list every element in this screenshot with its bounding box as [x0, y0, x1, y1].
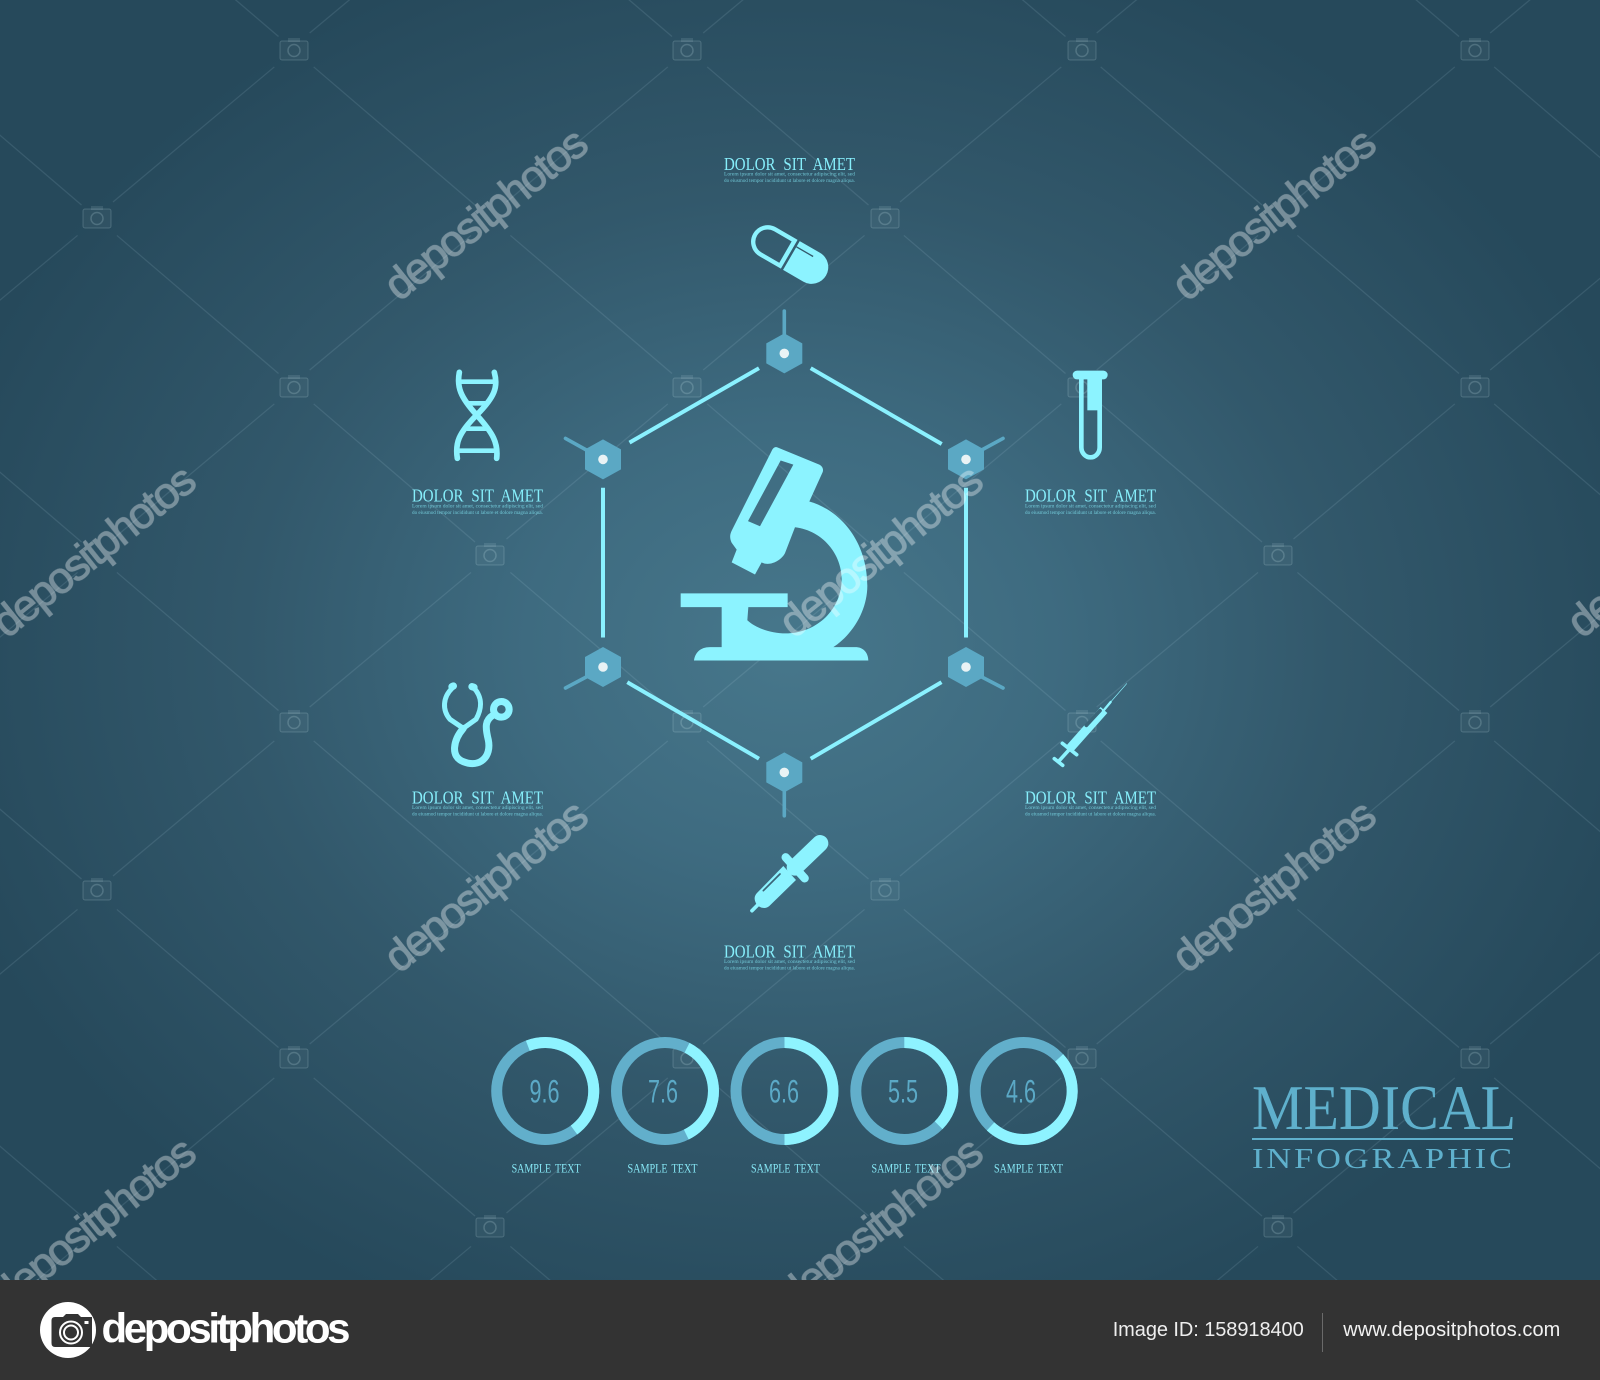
icon: microscope [681, 447, 868, 661]
image id: Image ID: 158918400 [1113, 1319, 1304, 1341]
logo wordmark: depositphotos [102, 1305, 350, 1352]
label: top: DOLOR SIT AMET [724, 154, 855, 174]
icon: depositphotos logo [40, 1302, 96, 1358]
label: upper right [1025, 486, 1156, 516]
icon: DNA helix [457, 372, 497, 458]
donut: 6.6: SAMPLE TEXT [751, 1162, 820, 1176]
donut: 4.6 [955, 1022, 1092, 1176]
icon: capsule [747, 220, 834, 290]
donut: 4.6: 4.6 [1006, 1074, 1036, 1110]
watermark camera icons [83, 38, 1489, 1237]
label: upper left: do eiusmod tempor incididunt ut labore et dolore magna aliqua. [412, 510, 543, 516]
depositphotos watermarks: depositphotos [375, 118, 597, 310]
donut: 5.5 [856, 1042, 953, 1176]
label: lower left: do eiusmod tempor incididunt ut labore et dolore magna aliqua. [412, 812, 543, 818]
donut: 9.6: SAMPLE TEXT [512, 1162, 581, 1176]
depositphotos watermarks: depositphotos [770, 455, 992, 647]
footer bar [0, 1280, 1600, 1380]
label: top: Lorem ipsum dolor sit amet, consectetur adipiscing elit, sed [724, 172, 855, 178]
label: upper left: Lorem ipsum dolor sit amet, consectetur adipiscing elit, sed [412, 504, 543, 510]
depositphotos watermarks: depositphotos [375, 790, 597, 982]
donut: 9.6: 9.6 [530, 1074, 560, 1110]
donut: 9.6 [483, 1028, 608, 1176]
hexagon nodes [585, 333, 984, 792]
label: top [724, 154, 855, 184]
donut: 5.5: 5.5 [888, 1074, 918, 1110]
depositphotos watermarks: depositphotos [1163, 118, 1385, 310]
donut: 6.6 [736, 1042, 833, 1176]
donut: 7.6: 7.6 [648, 1074, 678, 1110]
label: top: do eiusmod tempor incididunt ut labore et dolore magna aliqua. [724, 178, 855, 184]
label: lower right: DOLOR SIT AMET [1025, 787, 1156, 807]
label: bottom: Lorem ipsum dolor sit amet, consectetur adipiscing elit, sed [724, 959, 855, 965]
hexagon frame [566, 311, 1003, 816]
hexagon edges [603, 368, 966, 759]
label: upper left [412, 486, 543, 516]
donut: 7.6 [600, 1026, 730, 1176]
donut: 6.6: 6.6 [769, 1074, 799, 1110]
icon: dropper [752, 843, 820, 911]
node centres [598, 349, 971, 777]
label: lower left [412, 787, 543, 818]
website: www.depositphotos.com [1342, 1319, 1560, 1341]
label: upper right: do eiusmod tempor incididunt ut labore et dolore magna aliqua. [1025, 510, 1156, 516]
donut: 7.6: SAMPLE TEXT [628, 1162, 698, 1176]
label: bottom [724, 941, 855, 972]
hexagon spokes [566, 311, 1003, 816]
label: upper left: DOLOR SIT AMET [412, 486, 543, 506]
label: bottom: DOLOR SIT AMET [724, 941, 855, 961]
label: lower right [1025, 787, 1156, 818]
title block: MEDICAL [1252, 1072, 1516, 1143]
label: lower left: DOLOR SIT AMET [412, 787, 543, 807]
depositphotos watermarks: depositphotos [770, 1127, 992, 1319]
label: lower right: do eiusmod tempor incididunt ut labore et dolore magna aliqua. [1025, 812, 1156, 818]
label: lower left: Lorem ipsum dolor sit amet, consectetur adipiscing elit, sed [412, 805, 543, 811]
label: bottom: do eiusmod tempor incididunt ut labore et dolore magna aliqua. [724, 966, 855, 972]
title block: INFOGRAPHIC [1252, 1143, 1515, 1175]
depositphotos watermarks: depositphotos [1163, 790, 1385, 982]
label: upper right: Lorem ipsum dolor sit amet, consectetur adipiscing elit, sed [1025, 504, 1156, 510]
icon: test tube [1073, 371, 1108, 457]
icon: syringe [1054, 684, 1127, 765]
icon: stethoscope [444, 686, 509, 764]
title block [1252, 1072, 1516, 1175]
donut: 4.6: SAMPLE TEXT [994, 1162, 1063, 1176]
donut: 5.5: SAMPLE TEXT [872, 1162, 941, 1176]
label: upper right: DOLOR SIT AMET [1025, 486, 1156, 506]
label: lower right: Lorem ipsum dolor sit amet, consectetur adipiscing elit, sed [1025, 805, 1156, 811]
donut charts row [483, 1022, 1092, 1176]
